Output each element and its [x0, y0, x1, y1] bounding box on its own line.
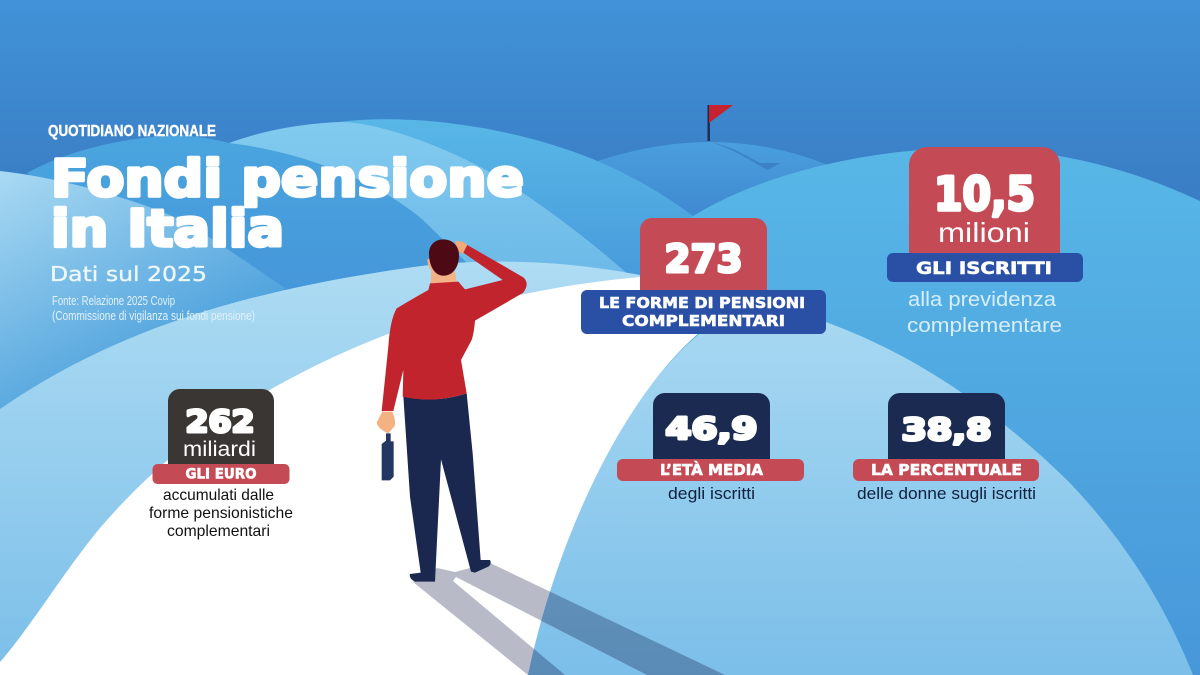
person: hand at side	[377, 412, 395, 433]
background: pale right hill	[528, 312, 1193, 675]
10,5 box	[909, 147, 1060, 272]
262 description: complementari	[167, 523, 270, 540]
title: Fondi pensione	[51, 150, 524, 209]
source note	[52, 294, 255, 323]
source note: Fonte: Relazione 2025 Covip	[52, 294, 175, 308]
person: raised hand	[455, 241, 467, 254]
title: in Italia	[51, 200, 284, 259]
person shadow	[413, 563, 725, 675]
icon: flag on the summit	[708, 105, 781, 170]
262 box	[168, 389, 274, 484]
46,9 box	[653, 393, 770, 473]
gli euro bar	[152, 464, 290, 484]
background: left hill	[0, 171, 285, 430]
10,5 description	[907, 288, 1062, 337]
forme label: COMPLEMENTARI	[622, 312, 785, 330]
38,8 box	[888, 393, 1005, 473]
background: light hill	[229, 122, 630, 300]
milioni unit: milioni	[938, 217, 1030, 248]
gli euro label: GLI EURO	[186, 466, 256, 482]
background: pale hill	[0, 262, 650, 675]
background: white road	[0, 277, 760, 675]
background: big right hill	[500, 148, 1200, 675]
38,8 value: 38,8	[902, 413, 992, 448]
miliardi unit: miliardi	[183, 438, 256, 461]
262 description: forme pensionistiche	[149, 505, 293, 522]
person: neck and ear	[427, 259, 457, 285]
source note: (Commissione di vigilanza sui fondi pensione)	[52, 309, 255, 323]
stat: 46,9 eta media	[617, 393, 804, 503]
forme label	[599, 294, 805, 330]
forme bar	[581, 290, 826, 334]
source label: Quotidiano Nazionale: QUOTIDIANO NAZIONALE	[48, 123, 216, 140]
273 box	[640, 218, 767, 318]
stat: 273 forme	[581, 218, 826, 334]
10,5 value: 10,5	[934, 167, 1035, 221]
stat: 10,5 milioni	[887, 147, 1083, 337]
person: red shirt	[382, 245, 527, 411]
eta bar	[617, 459, 804, 481]
subtitle: Dati sul 2025	[50, 262, 207, 286]
iscritti label: GLI ISCRITTI	[916, 259, 1052, 278]
262 description: accumulati dalle	[163, 487, 274, 504]
262 value: 262	[186, 405, 254, 440]
title	[51, 150, 524, 259]
background: mid-blue hill	[27, 135, 470, 300]
10,5 description: complementare	[907, 314, 1062, 337]
percentuale bar	[853, 459, 1039, 481]
person: briefcase	[382, 433, 394, 480]
person: hair	[429, 239, 459, 276]
273 value: 273	[664, 237, 742, 281]
eta label: L’ETÀ MEDIA	[660, 460, 763, 479]
262 description	[149, 487, 293, 540]
percentuale label: LA PERCENTUALE	[871, 461, 1022, 479]
iscritti bar	[887, 253, 1083, 282]
person looking at the flag	[377, 239, 527, 582]
10,5 description: alla previdenza	[908, 288, 1057, 311]
stat: 262 miliardi	[149, 389, 293, 540]
percentuale description: delle donne sugli iscritti	[857, 485, 1036, 503]
stat: 38,8 percentuale	[853, 393, 1039, 503]
background: far hill with flag	[560, 142, 850, 300]
forme label: LE FORME DI PENSIONI	[599, 294, 805, 312]
background: hill behind the light hill	[300, 119, 780, 320]
background: white road centre	[300, 277, 700, 675]
person: trousers	[403, 393, 491, 582]
46,9 value: 46,9	[666, 412, 758, 447]
eta description: degli iscritti	[668, 485, 755, 503]
